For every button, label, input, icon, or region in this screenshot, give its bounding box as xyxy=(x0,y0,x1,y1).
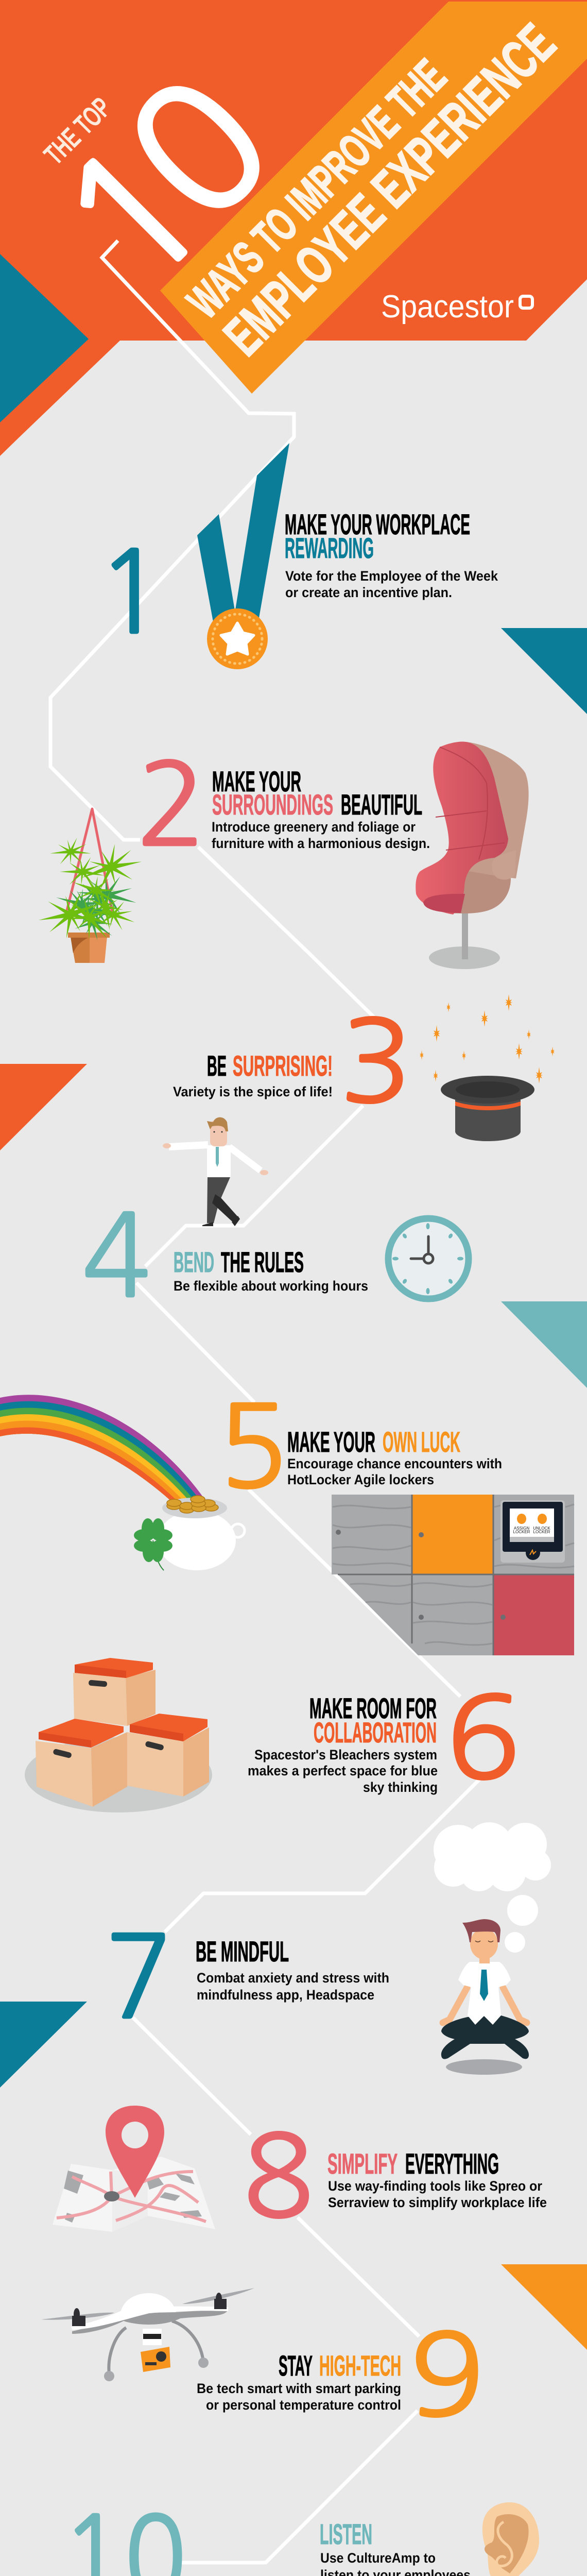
step 7 panel xyxy=(105,1822,551,2075)
text xyxy=(248,1747,438,1795)
header ribbon xyxy=(160,2,587,394)
number 8: 8 xyxy=(243,2120,314,2233)
icon: thought cloud xyxy=(434,1822,551,1953)
header teal triangle xyxy=(0,254,89,422)
heading: REWARDING xyxy=(285,532,374,564)
decorative triangle teal left xyxy=(0,2002,87,2088)
text: or personal temperature control xyxy=(206,2397,401,2413)
number 4: 4 xyxy=(82,1199,150,1313)
heading: MAKE YOUR xyxy=(212,765,301,798)
number 2: 2 xyxy=(136,748,206,861)
text: HotLocker Agile lockers xyxy=(287,1472,434,1487)
heading xyxy=(207,1049,333,1082)
number 5: 5 xyxy=(218,1391,288,1504)
heading: BEND xyxy=(174,1246,214,1278)
heading: SURPRISING! xyxy=(233,1049,333,1082)
decorative triangle teal right xyxy=(501,628,587,714)
icon: meditating man xyxy=(441,1919,529,2075)
text xyxy=(328,2178,547,2210)
icon: tightrope walker xyxy=(163,1117,268,1226)
heading: STAY xyxy=(279,2349,313,2382)
text: Be tech smart with smart parking xyxy=(197,2381,401,2396)
heading: THE RULES xyxy=(221,1246,304,1278)
icon: map with pin xyxy=(53,2106,215,2232)
heading xyxy=(212,765,422,821)
step 10 panel xyxy=(61,2501,539,2576)
title: the top 10: THE TOP xyxy=(38,91,117,171)
text: Spacestor's Bleachers system xyxy=(254,1747,437,1762)
icon: HotLocker lockers: UNLOCK xyxy=(533,1526,550,1531)
heading: BE MINDFUL xyxy=(196,1935,289,1968)
step 1 panel xyxy=(96,443,498,669)
heading xyxy=(174,1246,304,1278)
text: furniture with a harmonious design. xyxy=(212,836,430,851)
step 5 panel: OWN LUCK xyxy=(383,1426,460,1458)
step 6 panel xyxy=(25,1658,521,1812)
text xyxy=(197,1970,389,2003)
number 6: 6 xyxy=(446,1682,521,1795)
icon: medal xyxy=(197,443,289,669)
heading: LISTEN xyxy=(320,2518,372,2550)
number 9: 9 xyxy=(409,2319,485,2432)
text: Use CultureAmp to xyxy=(320,2550,436,2566)
icon: hanging plant xyxy=(34,809,145,963)
title: the top 10: 10 xyxy=(32,48,301,316)
heading: MAKE YOUR xyxy=(287,1426,375,1458)
icon: ear xyxy=(482,2502,539,2576)
text xyxy=(287,1456,502,1487)
text xyxy=(285,568,498,600)
heading: HIGH-TECH xyxy=(319,2349,401,2382)
icon: pod chair xyxy=(416,742,529,969)
text: Combat anxiety and stress with xyxy=(197,1970,389,1986)
heading: EVERYTHING xyxy=(405,2147,499,2180)
text xyxy=(212,819,430,851)
heading xyxy=(309,1692,437,1749)
number 7: 7 xyxy=(105,1921,173,2034)
header panel: orange background xyxy=(0,0,587,456)
icon: rainbow xyxy=(0,1395,204,1505)
text: Be flexible about working hours xyxy=(174,1278,368,1294)
text: Introduce greenery and foliage or xyxy=(212,819,416,835)
icon: HotLocker lockers xyxy=(332,1495,574,1655)
number 1: 1 xyxy=(96,536,165,649)
icon: HotLocker lockers: ASSIGN xyxy=(514,1526,529,1531)
step 2 panel: BEAUTIFUL xyxy=(341,788,422,821)
heading: SURROUNDINGS xyxy=(212,788,333,821)
icon: pot of gold xyxy=(158,1496,245,1570)
icon: bleacher boxes xyxy=(25,1658,212,1812)
text: Variety is the spice of life! xyxy=(173,1084,333,1099)
connecting path xyxy=(50,241,479,2563)
text xyxy=(197,2381,401,2413)
text: or create an incentive plan. xyxy=(285,585,452,600)
heading xyxy=(285,508,470,564)
icon: four-leaf clover xyxy=(134,1518,172,1570)
heading: BE xyxy=(207,1049,227,1082)
icon: top hat xyxy=(441,1076,534,1141)
step 6 panel: COLLABORATION xyxy=(314,1716,437,1749)
icon: HotLocker lockers: LOCKER xyxy=(513,1530,530,1534)
header logo: Spacestor: Spacestor xyxy=(381,289,514,325)
text xyxy=(320,2550,471,2576)
decorative triangle light teal right xyxy=(501,1301,587,1388)
step 2 panel xyxy=(34,742,529,969)
icon: clock xyxy=(388,1218,469,1299)
step 3 panel xyxy=(163,994,555,1226)
icon: HotLocker lockers: LOCKER xyxy=(533,1530,550,1534)
text: makes a perfect space for blue xyxy=(248,1763,438,1778)
icon: drone xyxy=(41,2288,254,2381)
text: sky thinking xyxy=(363,1780,438,1795)
heading xyxy=(279,2349,401,2382)
heading: SIMPLIFY xyxy=(327,2147,398,2180)
decorative triangle orange left xyxy=(0,1064,87,1150)
step 8 panel xyxy=(53,2106,547,2233)
icon: magic sparkles xyxy=(420,994,555,1083)
text: Vote for the Employee of the Week xyxy=(285,568,498,584)
text: Use way-finding tools like Spreo or xyxy=(328,2178,542,2194)
step 5 panel xyxy=(0,1391,574,1655)
step 4 panel xyxy=(82,1199,469,1313)
heading: MAKE ROOM FOR xyxy=(309,1692,437,1724)
decorative triangle amber right xyxy=(501,2264,587,2350)
step 9 panel xyxy=(41,2288,485,2432)
text: mindfulness app, Headspace xyxy=(197,1987,374,2003)
number 3: 3 xyxy=(340,1005,412,1118)
text: Encourage chance encounters with xyxy=(287,1456,502,1471)
text: Serraview to simplify workplace life xyxy=(328,2195,547,2210)
